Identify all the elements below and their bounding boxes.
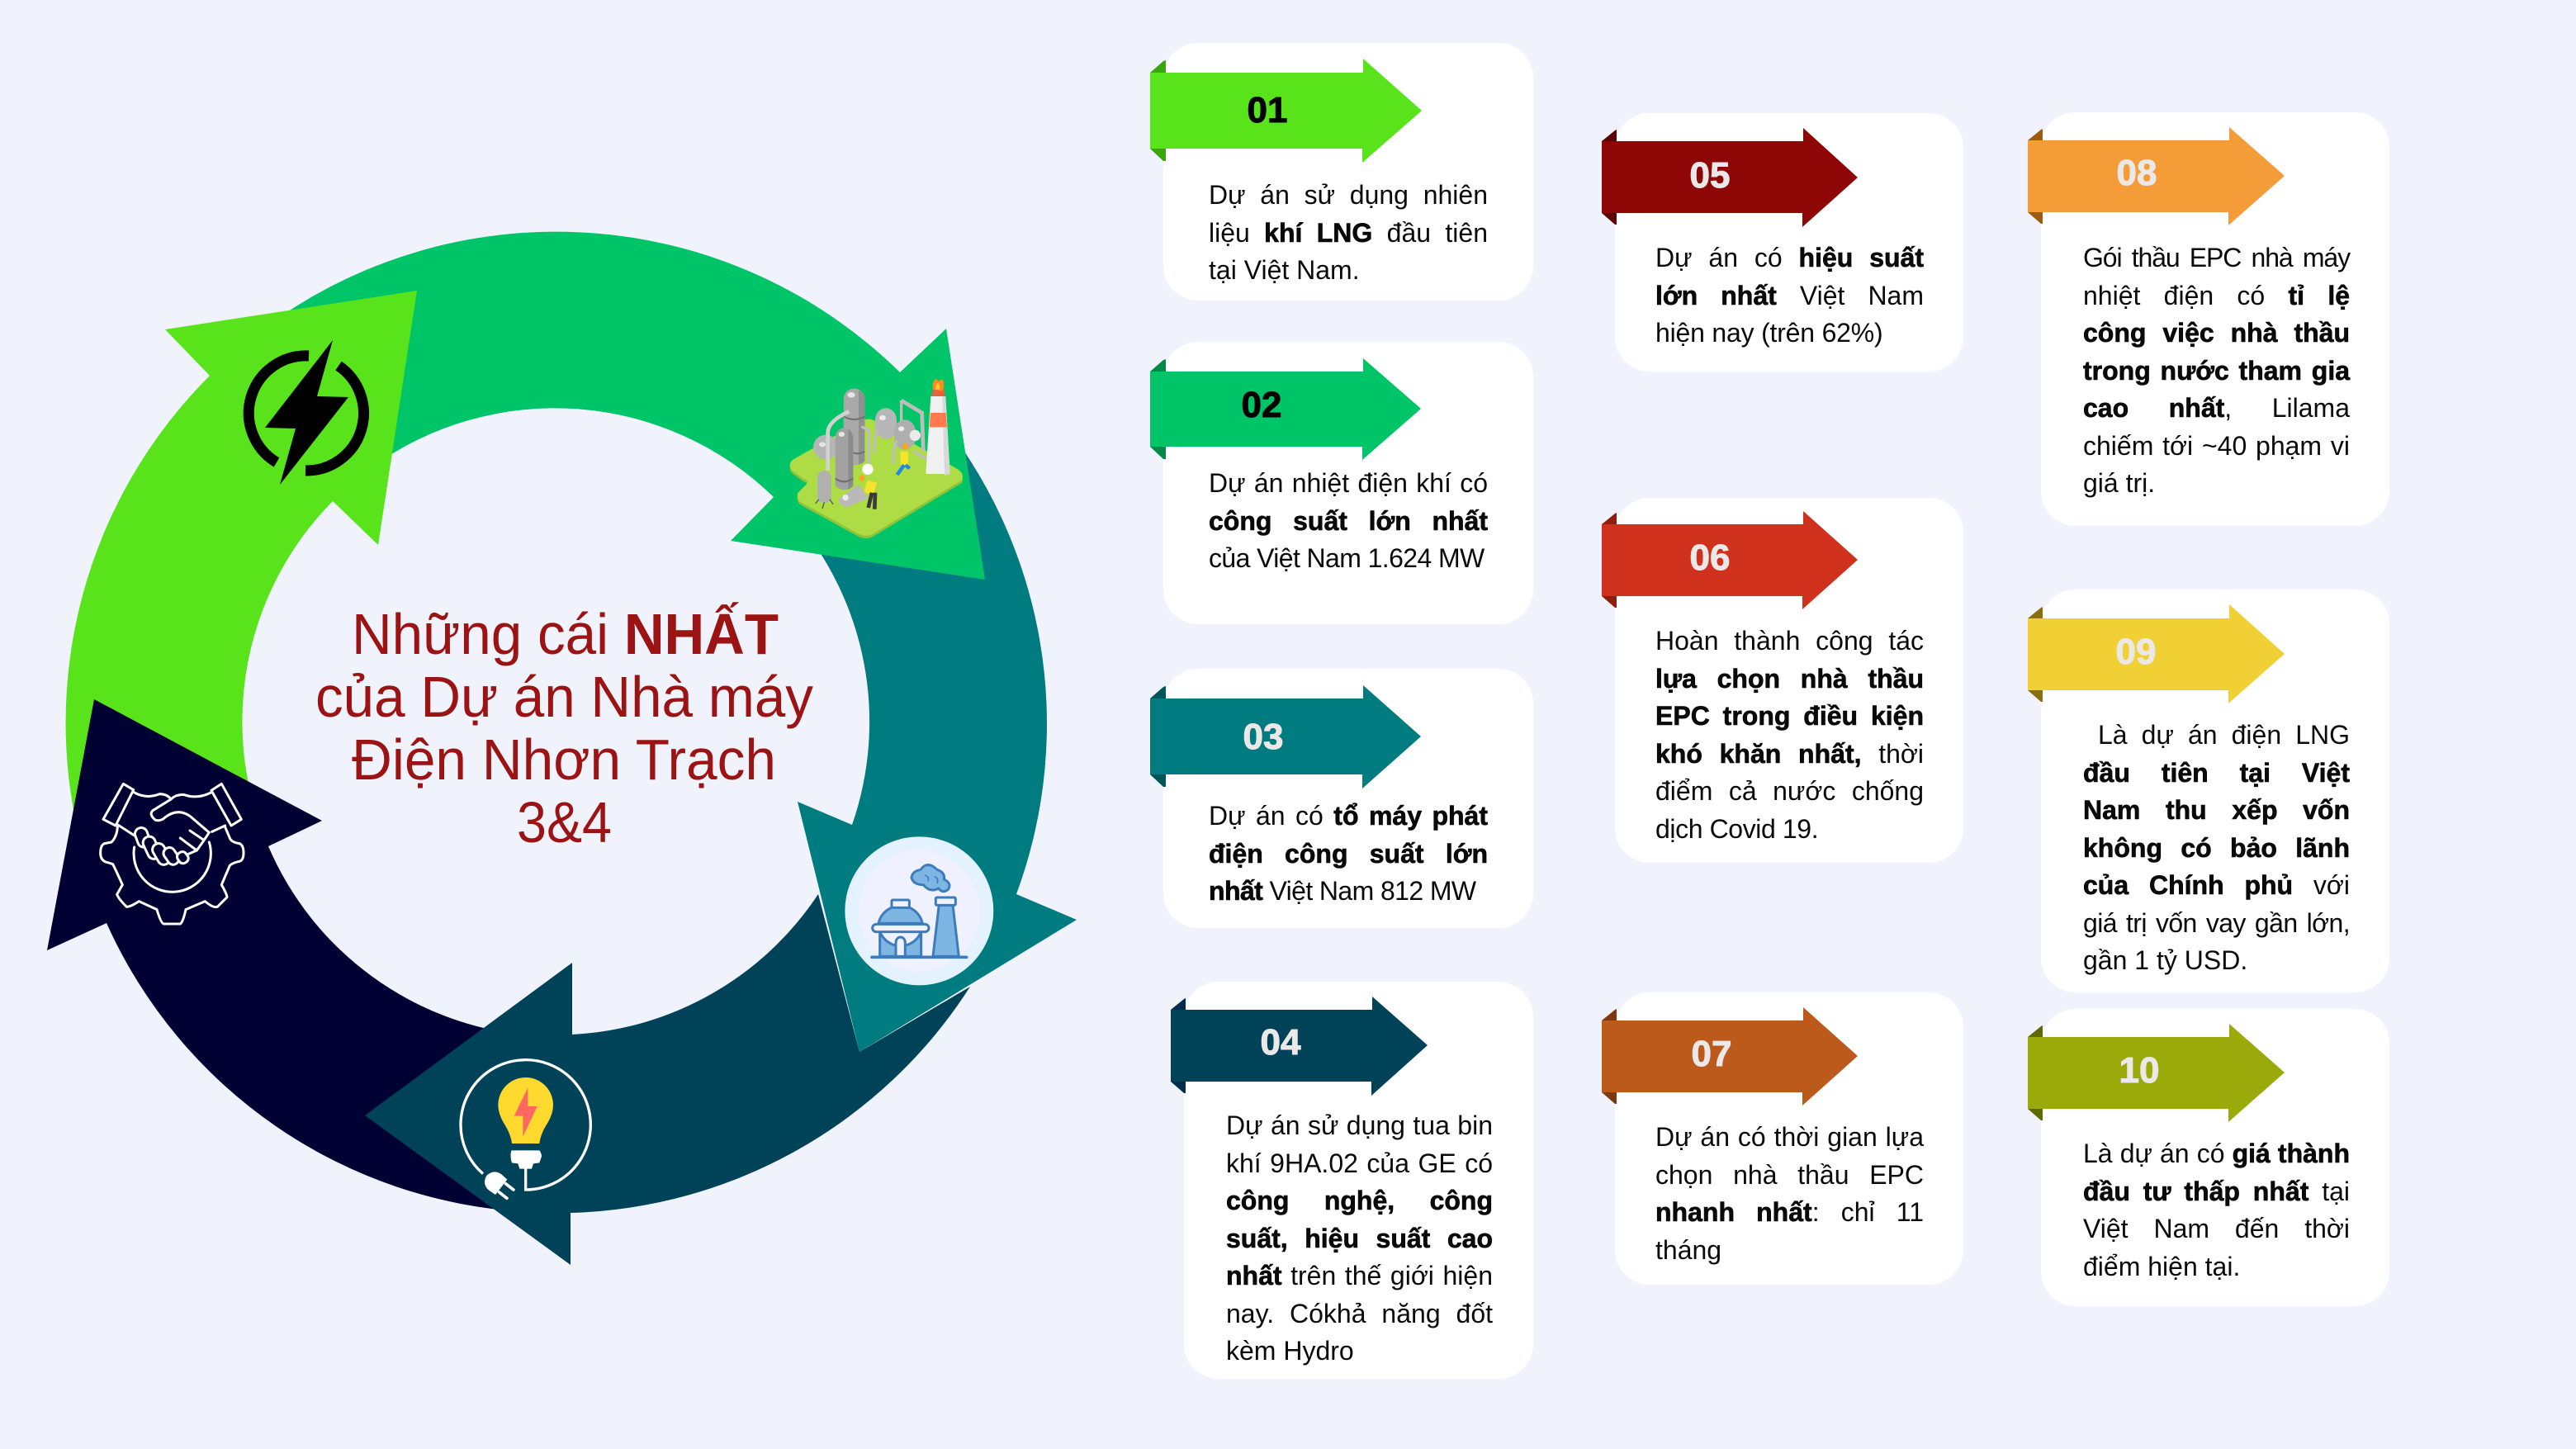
text 06: Hoàn thành công tác (1655, 626, 1924, 656)
icon: light bulb with plug (461, 1060, 590, 1203)
panel: 08 (2028, 112, 2389, 526)
title: Điện Nhơn Trạch (352, 727, 776, 792)
banner arrow 09 (2028, 604, 2285, 703)
banner arrow 08 (2028, 127, 2285, 225)
panel: 10 (2028, 1009, 2389, 1306)
text 07: Dự án có thời gian lựa (1655, 1122, 1924, 1152)
text 06: lựa chọn nhà thầu (1655, 664, 1924, 694)
text 01 (1209, 180, 1488, 285)
panel: 03 (1150, 669, 1533, 928)
arrow segment: lime green (66, 291, 417, 850)
panel: 06 (1602, 498, 1963, 863)
text 09: đầu tiên tại Việt (2083, 758, 2350, 788)
number 10: 10 (2119, 1050, 2159, 1091)
text 04: kèm Hydro (1226, 1336, 1354, 1366)
text 08: giá trị. (2083, 468, 2155, 498)
panel: 05 (1602, 113, 1963, 372)
text 03: điện công suất lớn (1209, 839, 1488, 869)
banner arrow 06 (1602, 511, 1858, 609)
number 02: 02 (1242, 385, 1281, 425)
text 04: Dự án sử dụng tua bin (1226, 1110, 1493, 1140)
banner arrow 07 (1602, 1007, 1858, 1106)
arrow segment: navy (47, 699, 528, 1212)
icon: handshake over gear (101, 784, 244, 924)
icon: power bolt (249, 340, 363, 485)
text 04: khí 9HA.02 của GE có (1226, 1148, 1493, 1177)
text 09: của Chính phủ với (2083, 870, 2350, 900)
text 05 (1655, 243, 1924, 348)
text 08: công việc nhà thầu (2083, 318, 2350, 348)
text 10: Việt Nam đến thời (2083, 1214, 2350, 1243)
number 05: 05 (1690, 155, 1730, 196)
panel: 09 (2028, 590, 2389, 992)
text 08: chiếm tới ~40 phạm vi (2083, 431, 2350, 461)
text 09: gần 1 tỷ USD. (2083, 945, 2247, 975)
text 06: điểm cả nước chống (1655, 776, 1924, 806)
banner arrow 10 (2028, 1024, 2285, 1122)
text 06 (1655, 626, 1924, 844)
banner arrow 05 (1602, 128, 1858, 227)
number 07: 07 (1692, 1034, 1731, 1074)
banner arrow 02 (1150, 358, 1421, 460)
banner arrow 04 (1171, 997, 1428, 1096)
title (315, 602, 813, 855)
text 02 (1209, 468, 1488, 573)
title: của Dự án Nhà máy (315, 665, 813, 729)
number 09: 09 (2116, 632, 2156, 672)
text 10: đầu tư thấp nhất tại (2083, 1176, 2350, 1205)
text 06: EPC trong điều kiện (1655, 701, 1924, 731)
banner arrow 01 (1150, 59, 1422, 163)
text 07: chọn nhà thầu EPC (1655, 1159, 1924, 1189)
number 03: 03 (1243, 717, 1283, 757)
text 09: giá trị vốn vay gần lớn, (2083, 908, 2350, 938)
text 03 (1209, 801, 1488, 906)
text 06: dịch Covid 19. (1655, 814, 1818, 844)
number 04: 04 (1261, 1022, 1300, 1063)
arrow segment: teal (793, 410, 1077, 1052)
text 05: hiện nay (trên 62%) (1655, 318, 1882, 348)
panel: 04 (1171, 982, 1533, 1379)
number 08: 08 (2117, 153, 2157, 193)
text 04 (1226, 1110, 1493, 1366)
text 05: Dự án có hiệu suất (1655, 243, 1924, 272)
text 02: của Việt Nam 1.624 MW (1209, 543, 1485, 573)
icon: isometric gas plant (790, 378, 963, 538)
title: 3&4 (517, 790, 612, 855)
text 03: nhất Việt Nam 812 MW (1209, 876, 1476, 906)
text 01: liệu khí LNG đầu tiên (1209, 218, 1488, 248)
text 07: nhanh nhất: chỉ 11 (1655, 1197, 1924, 1227)
text 08: cao nhất, Lilama (2083, 393, 2350, 423)
text 05: lớn nhất Việt Nam (1655, 281, 1924, 310)
icon: factory in circle (845, 836, 993, 985)
text 10: Là dự án có giá thành (2083, 1139, 2350, 1168)
banner arrow 03 (1150, 685, 1421, 788)
text 07: tháng (1655, 1235, 1721, 1265)
text 10: điểm hiện tại. (2083, 1252, 2240, 1281)
panel: 07 (1602, 992, 1963, 1285)
text 04: suất, hiệu suất cao (1226, 1224, 1493, 1253)
text 08: nhiệt điện có tỉ lệ (2083, 281, 2350, 310)
text 10 (2083, 1139, 2350, 1281)
text 09: Là dự án điện LNG (2098, 720, 2350, 750)
title: Những cái NHẤT (352, 602, 779, 666)
panel: 01 (1150, 43, 1533, 301)
text 01: tại Việt Nam. (1209, 255, 1360, 285)
text 07 (1655, 1122, 1924, 1265)
text 08: Gói thầu EPC nhà máy (2083, 243, 2350, 272)
number 06: 06 (1690, 537, 1730, 578)
text 06: khó khăn nhất, thời (1655, 738, 1924, 768)
text 09 (2083, 720, 2350, 975)
text 08: trong nước tham gia (2083, 355, 2350, 385)
text 02: công suất lớn nhất (1209, 505, 1488, 535)
text 04: nay. Cókhả năng đốt (1226, 1298, 1493, 1328)
arrow segment: emerald green (272, 232, 985, 580)
panel: 02 (1150, 342, 1533, 624)
text 01: Dự án sử dụng nhiên (1209, 180, 1488, 210)
arrow segment: dark teal (365, 894, 970, 1265)
text 04: công nghệ, công (1226, 1186, 1493, 1215)
number 01: 01 (1248, 90, 1287, 130)
text 08 (2083, 243, 2351, 498)
text 04: nhất trên thế giới hiện (1226, 1261, 1493, 1290)
text 09: Nam thu xếp vốn (2083, 795, 2350, 825)
text 03: Dự án có tổ máy phát (1209, 801, 1488, 831)
text 09: không có bảo lãnh (2083, 832, 2350, 862)
text 02: Dự án nhiệt điện khí có (1209, 468, 1488, 498)
